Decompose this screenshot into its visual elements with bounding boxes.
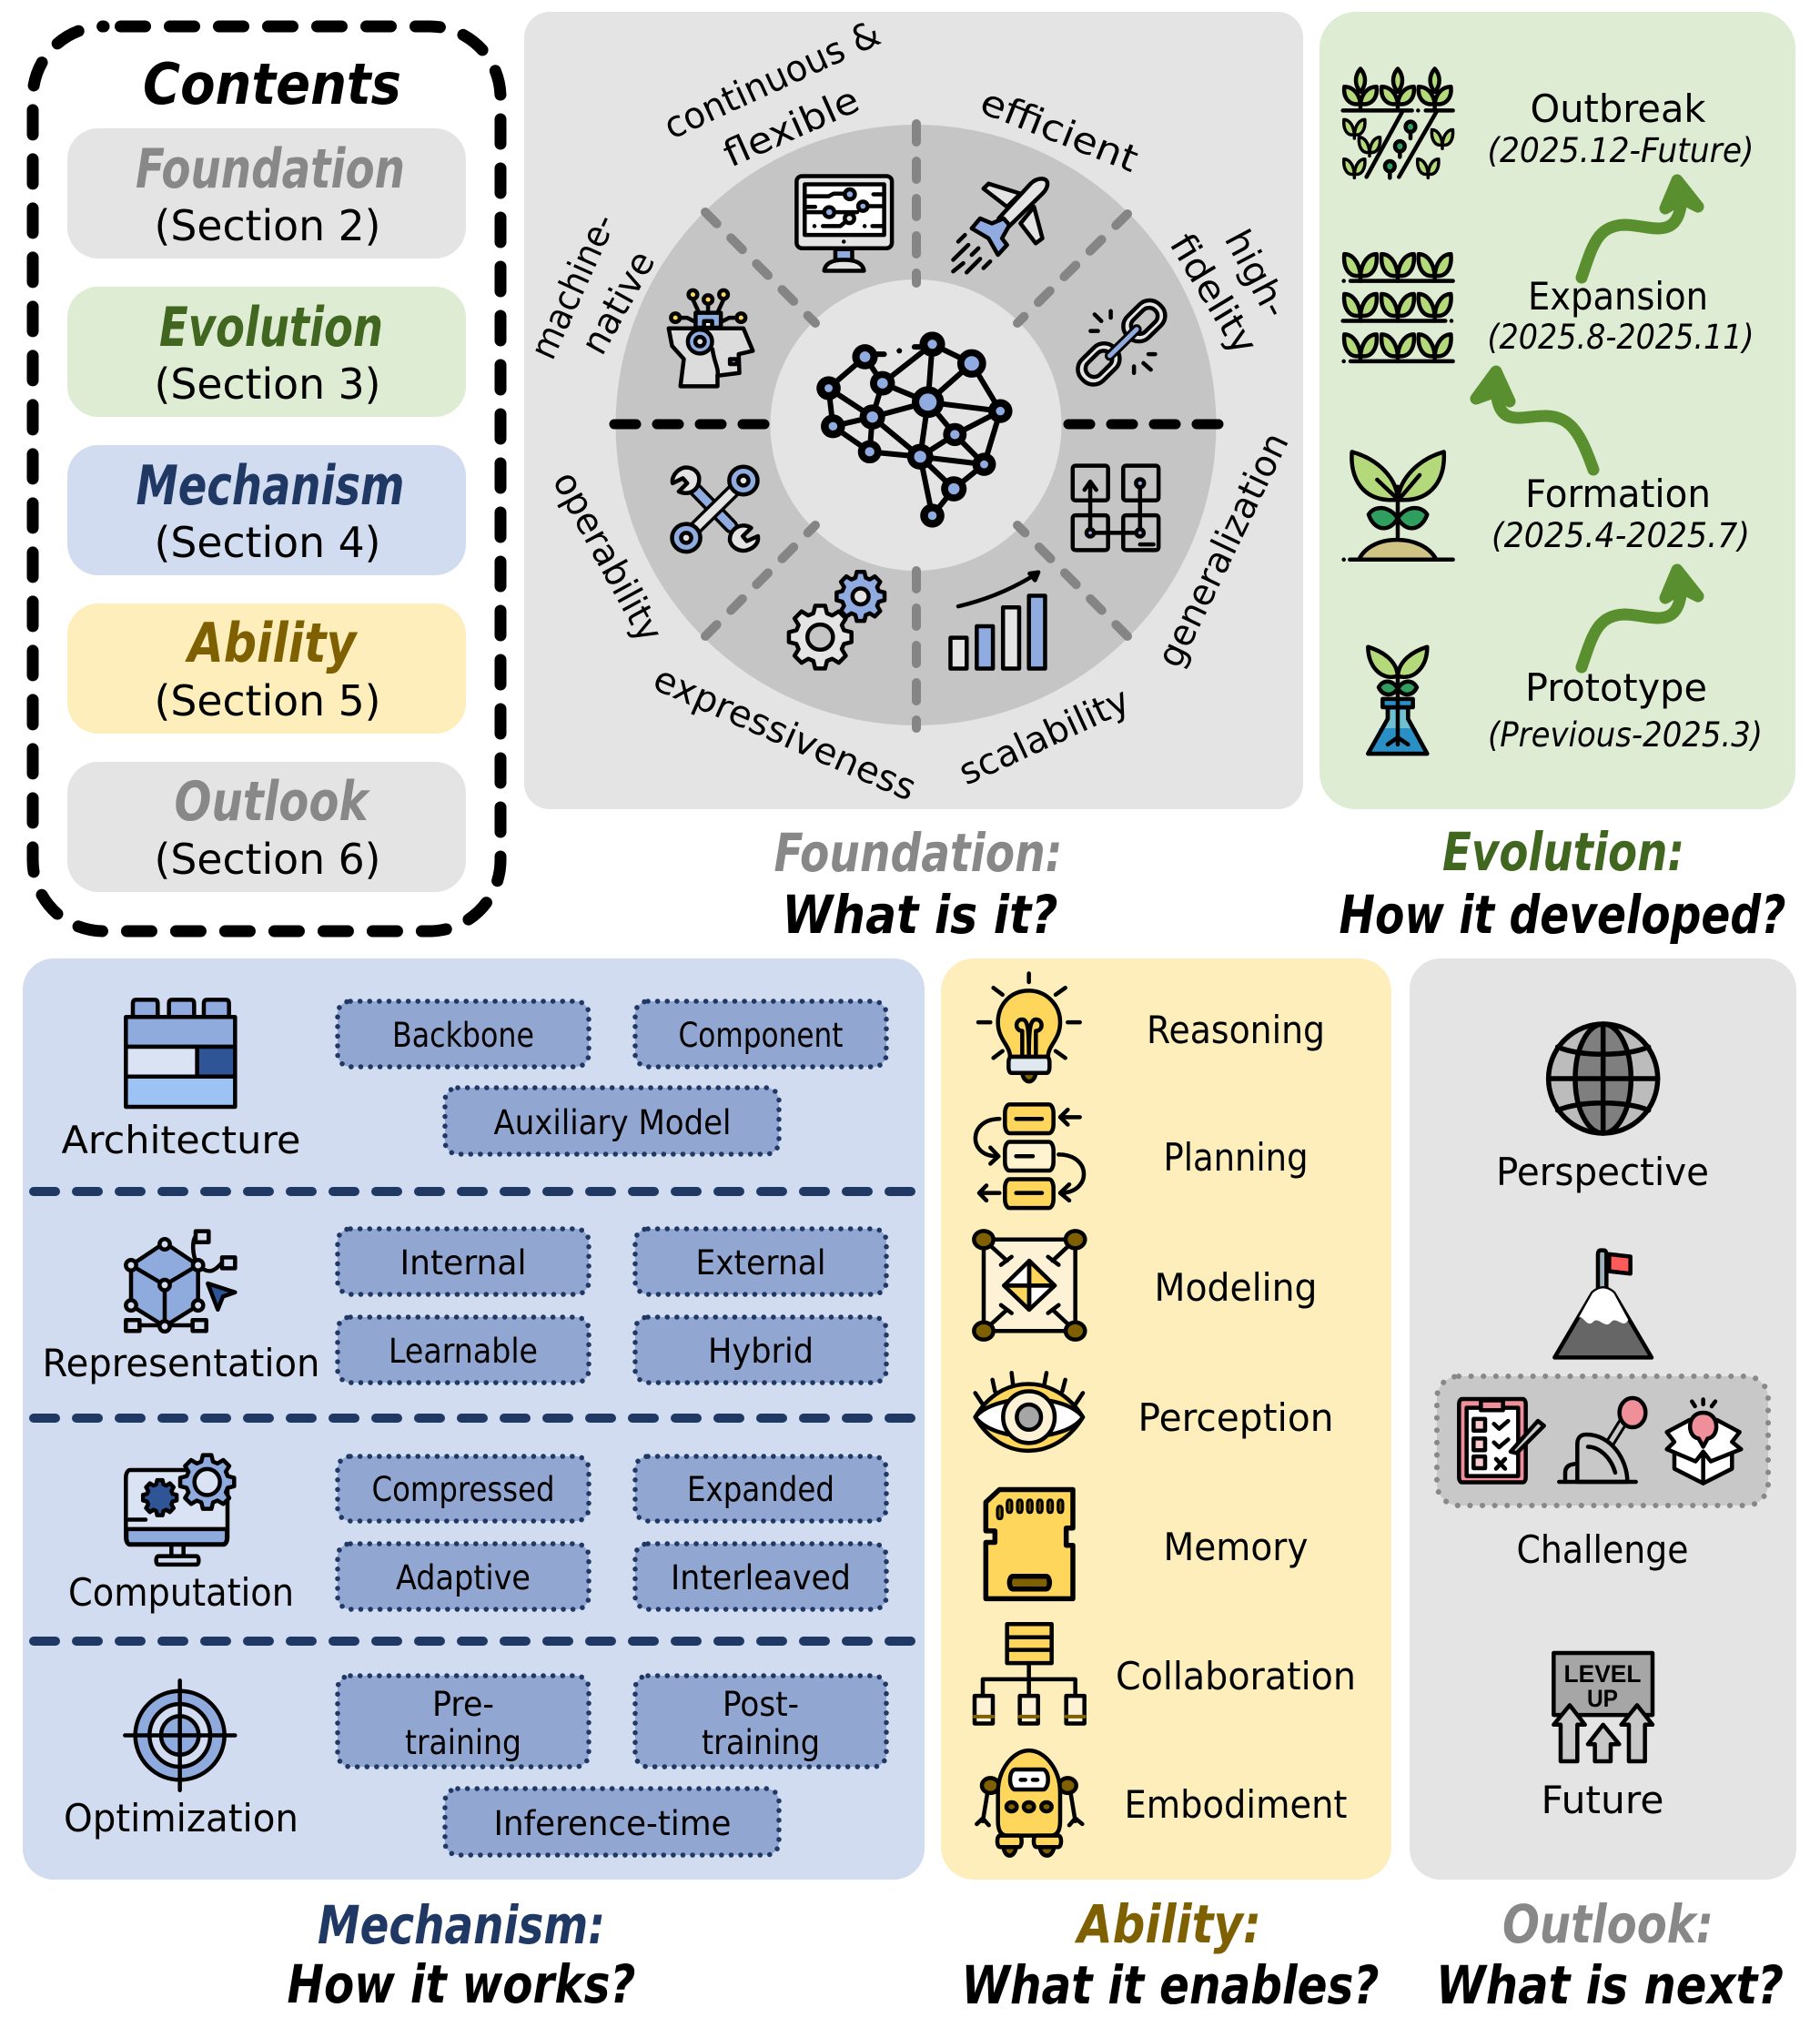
label: collaboration: Collaboration [1116,1654,1356,1698]
label: perspective: Perspective [1496,1150,1709,1194]
icon: mountain flag [1554,1251,1652,1357]
chip: adaptive: Adaptive [396,1558,531,1597]
icon: planning flow [976,1104,1084,1208]
contents dashed frame [33,26,500,931]
contents item: mechanism: (Section 4) [155,518,380,567]
icon: representation cube [126,1232,235,1332]
label: perception: Perception [1138,1395,1334,1440]
text: outbreak: (2025.12-Future) [1487,131,1754,170]
chip: auxiliary model: Auxiliary Model [493,1103,732,1142]
label: high-fidelity [1161,223,1297,362]
icon: chain link [1072,295,1171,390]
chip: post-training: Post- [723,1685,799,1724]
icon: level up: UP [1587,1685,1618,1712]
icon: checklist [1459,1399,1544,1483]
label: machine-native: native [573,244,663,361]
contents item: ability [67,603,466,734]
arrow: prototype to formation [1582,570,1698,667]
chip: component: Component [679,1016,843,1055]
chip: component [635,1001,886,1067]
icon: level up: LEVEL [1563,1660,1642,1688]
text: outbreak [1487,86,1754,170]
challenge group [1437,1376,1768,1506]
label: expressiveness: expressiveness [647,658,922,809]
icon: monitor circuit [796,176,892,270]
icon: formation seedling [1344,451,1453,560]
caption: foundation [774,822,1063,946]
text: expansion: Expansion [1528,274,1708,319]
wheel outer ring [615,125,1216,725]
chip: adaptive [338,1544,589,1609]
panel: foundation [522,12,1303,809]
chip: pre-training: training [405,1723,521,1762]
wheel inner circle [770,279,1061,571]
text: prototype [1488,665,1763,755]
icon: level up [1553,1653,1653,1761]
chip: post-training [635,1676,886,1767]
text: formation: (2025.4-2025.7) [1491,516,1750,555]
icon: lever [1559,1398,1645,1482]
chip: hybrid: Hybrid [708,1332,814,1371]
panel: outlook [1410,958,1796,1880]
caption: outlook [1436,1893,1784,2016]
icon: light bulb [978,973,1080,1081]
wheel dividers [614,124,1221,728]
chip: external: External [695,1243,826,1283]
icon: eye [976,1373,1083,1451]
contents item: mechanism: Mechanism [136,454,404,518]
chip: expanded [635,1456,886,1521]
label: memory: Memory [1163,1525,1309,1569]
icon: modeling frame [974,1231,1085,1340]
icon: collaboration tree [975,1624,1085,1723]
arrow: formation to expansion [1476,371,1593,470]
text: prototype: Prototype [1525,665,1707,710]
icon: computation monitor [126,1455,234,1565]
icon: crossed wrenches [672,467,758,552]
label: architecture: Architecture [62,1118,300,1162]
label: machine-native: machine- [522,208,624,366]
chip: inference-time [445,1789,779,1855]
icon: plane [953,178,1047,272]
contents item: foundation [67,128,466,259]
text: outbreak: Outbreak [1531,86,1706,131]
caption: ability: Ability: [1075,1893,1261,1955]
contents item: foundation: Foundation [136,137,405,201]
text: formation: Formation [1525,471,1711,516]
label: planning: Planning [1163,1135,1309,1180]
chip: learnable [338,1317,589,1383]
row dividers [34,1191,913,1641]
chip: interleaved [635,1544,886,1609]
panel: ability [941,958,1391,1880]
caption: ability [961,1893,1380,2016]
chip: interleaved: Interleaved [671,1558,851,1597]
caption: foundation: What is it? [783,884,1057,946]
contents item: outlook [67,762,466,892]
chip: internal: Internal [400,1243,526,1283]
chip: backbone [338,1001,589,1067]
icon: robot [976,1750,1082,1856]
icon: architecture blocks [126,999,235,1107]
icon: prototype flask [1368,647,1427,754]
caption: mechanism: Mechanism: [318,1894,605,1956]
label: high-fidelity: high- [1216,223,1297,325]
label: challenge: Challenge [1516,1527,1689,1572]
chip: internal [338,1229,589,1294]
caption: outlook: Outlook: [1502,1893,1714,1955]
caption: evolution [1340,821,1785,946]
text: expansion: (2025.8-2025.11) [1487,318,1754,357]
label: embodiment: Embodiment [1125,1782,1347,1827]
text: prototype: (Previous-2025.3) [1488,715,1763,755]
caption: evolution: Evolution: [1442,821,1684,883]
chip: pre-training [338,1676,589,1767]
label: computation: Computation [68,1570,294,1615]
caption: mechanism: How it works? [288,1953,635,2015]
contents item: foundation: (Section 2) [155,201,380,250]
panel: mechanism [23,958,925,1880]
panel: contents [33,26,500,931]
label: representation: Representation [42,1341,320,1385]
label: operability: operability [544,464,671,649]
caption: foundation: Foundation: [774,822,1063,884]
caption: ability: What it enables? [961,1954,1380,2016]
label: modeling: Modeling [1154,1265,1318,1310]
arrow: expansion to outbreak [1582,180,1698,278]
contents item: evolution: Evolution [159,296,383,360]
text: formation [1491,471,1750,555]
contents item: outlook: Outlook [175,770,370,834]
contents item: ability: (Section 5) [155,676,380,725]
label: high-fidelity: fidelity [1161,227,1265,362]
label: continuous and flexible: flexible [717,79,865,176]
label: future: Future [1542,1778,1663,1822]
label: continuous and flexible: continuous & [658,13,886,148]
icon: brain network [816,331,1013,528]
chip: hybrid [635,1317,886,1383]
icon: memory card [986,1489,1073,1598]
chip: auxiliary model [445,1088,779,1154]
label: generalization: generalization [1149,426,1298,674]
label: reasoning: Reasoning [1147,1008,1325,1052]
contents title: Contents [143,51,401,117]
icon: machine head [669,290,753,386]
icon: globe [1549,1024,1658,1133]
icon: open box [1667,1399,1741,1484]
contents item: mechanism [67,445,466,575]
label: scalability: scalability [953,679,1136,794]
chip: inference-time: Inference-time [493,1804,732,1843]
contents item: outlook: (Section 6) [155,835,380,884]
panel: evolution [1320,12,1795,809]
chip: compressed: Compressed [371,1470,555,1509]
chip: post-training: training [702,1723,820,1762]
icon: node grid [1073,466,1158,550]
chip: pre-training: Pre- [432,1685,494,1724]
text: expansion [1487,274,1754,357]
chip: external [635,1229,886,1294]
contents item: ability: Ability [185,612,359,675]
label: optimization: Optimization [64,1796,298,1840]
icon: outbreak field [1343,69,1453,177]
chip: expanded: Expanded [687,1470,834,1509]
chip: compressed [338,1456,589,1521]
caption: mechanism [288,1894,635,2015]
chip: backbone: Backbone [392,1016,534,1055]
icon: optimization target [125,1680,235,1790]
contents item: evolution [67,287,466,417]
icon: expansion rows [1343,254,1453,361]
label: efficient: efficient [975,81,1144,181]
icon: gears [789,572,885,668]
chip: learnable: Learnable [389,1332,538,1371]
contents item: evolution: (Section 3) [155,360,380,409]
icon: growth bars [950,573,1045,668]
